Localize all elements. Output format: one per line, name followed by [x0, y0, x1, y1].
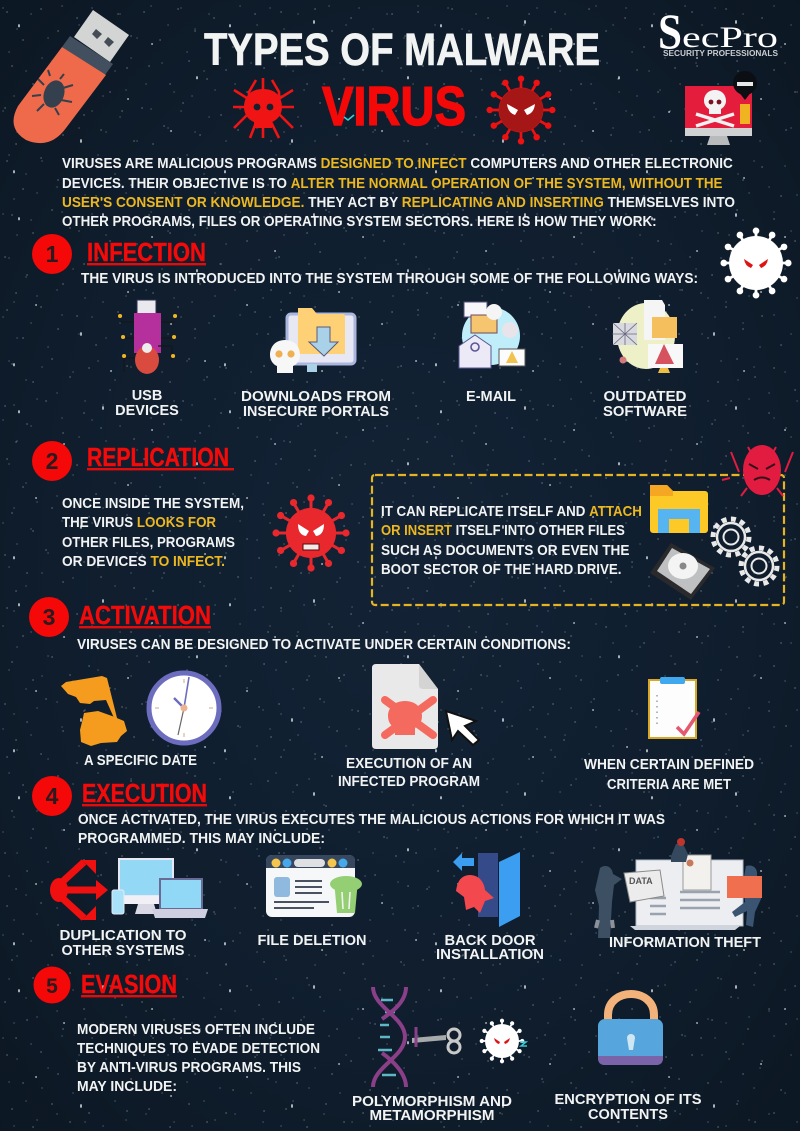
icon: angry red virus	[276, 498, 346, 568]
label: USB devices: DEVICES	[115, 403, 179, 419]
text: evasion	[77, 1022, 320, 1095]
icon: outdated software	[613, 300, 683, 373]
intro text: USER'S CONSENT OR KNOWLEDGE. THEY ACT BY REPLICATING AND INSERTING THEMSELVES INTO	[62, 194, 735, 210]
icon: white virus	[724, 231, 788, 295]
label: encryption: CONTENTS	[588, 1107, 668, 1123]
icon: back door	[453, 852, 520, 927]
label: e-mail: E-MAIL	[466, 389, 516, 405]
section 5: evasion	[34, 966, 702, 1124]
number badge 4	[32, 776, 72, 816]
icon: hacked monitor with skull	[685, 71, 757, 145]
icon: data thieves	[595, 838, 762, 938]
icon: cursor	[446, 711, 479, 745]
label: polymorphism and metamorphism: METAMORPHISM	[370, 1108, 494, 1124]
label: back door installation: INSTALLATION	[436, 947, 544, 963]
logo: SecPro	[658, 3, 779, 59]
icon: red skull circuit bug	[233, 78, 294, 138]
intro text: VIRUSES ARE MALICIOUS PROGRAMS DESIGNED TO INFECT COMPUTERS AND OTHER ELECTRONIC	[62, 155, 733, 171]
icon: red spreading arrows	[50, 860, 108, 920]
logo: SecPro: SECURITY PROFESSIONALS	[663, 49, 779, 58]
text: looks for files: ONCE INSIDE THE SYSTEM,	[62, 496, 244, 512]
icon: red bug	[722, 445, 793, 496]
label: defined criteria: CRITERIA ARE MET	[607, 777, 731, 793]
label: downloads from insecure portals: DOWNLOADS FROM	[241, 389, 391, 405]
icon: USB stick with bug	[14, 10, 129, 143]
label: outdated software	[603, 389, 687, 420]
text: evasion: MODERN VIRUSES OFTEN INCLUDE	[77, 1022, 315, 1038]
icon: data thieves: DATA	[629, 876, 653, 886]
text: looks for files: THE VIRUS LOOKS FOR	[62, 513, 216, 530]
section 3: activation	[29, 597, 754, 793]
text: looks for files	[62, 496, 244, 569]
label: back door installation	[436, 933, 544, 963]
callout: replicate and attach: OR INSERT ITSELF INTO OTHER FILES	[381, 522, 625, 538]
label: outdated software: OUTDATED	[604, 389, 686, 405]
section 1: infection	[32, 231, 788, 420]
subtitle: infection: THE VIRUS IS INTRODUCED INTO THE SYSTEM THROUGH SOME OF THE FOLLOWING WAYS:	[81, 271, 698, 287]
icon: padlock	[598, 994, 663, 1065]
icon: orange calendar shape	[61, 676, 127, 746]
label: duplication: DUPLICATION TO	[60, 928, 186, 944]
intro text: OTHER PROGRAMS, FILES OR OPERATING SYSTEM SECTORS. HERE IS HOW THEY WORK:	[62, 212, 657, 229]
logo: SecPro: ecPro	[682, 21, 778, 54]
label: duplication	[60, 928, 186, 959]
text: execution: ONCE ACTIVATED, THE VIRUS EXECUTES THE MALICIOUS ACTIONS FOR WHICH IT WAS	[78, 812, 665, 828]
section 2: replication	[32, 441, 793, 605]
number badge 5	[34, 966, 70, 1004]
icon: file deletion browser	[266, 855, 362, 917]
icon: devices	[112, 859, 208, 918]
icon: red virus with eyes	[490, 79, 552, 141]
number badge 1	[32, 234, 72, 274]
label: file deletion: FILE DELETION	[258, 933, 366, 949]
icon: small white virus	[482, 1021, 527, 1061]
text: evasion: BY ANTI-VIRUS PROGRAMS. THIS	[77, 1060, 301, 1076]
icon: folder	[650, 485, 708, 533]
icon: gears	[713, 519, 777, 584]
icon: DNA strand	[373, 987, 406, 1087]
heading: infection: INFECTION	[87, 237, 206, 267]
text: execution: PROGRAMMED. THIS MAY INCLUDE:	[78, 831, 325, 847]
section 4: execution	[32, 776, 762, 963]
text: looks for files: OR DEVICES TO INFECT.	[62, 553, 225, 569]
icon: USB bug	[120, 300, 175, 374]
icon: e-mail threats	[459, 302, 525, 368]
label: execution of an infected program	[338, 756, 480, 790]
callout: replicate and attach: IT CAN REPLICATE ITSELF AND ATTACH	[381, 502, 642, 519]
intro text	[62, 155, 735, 229]
label: defined criteria: WHEN CERTAIN DEFINED	[584, 757, 754, 773]
number badge 3: 3	[43, 604, 55, 630]
label: encryption	[554, 1092, 702, 1123]
icon: clock	[149, 673, 219, 743]
logo: SecPro: S	[658, 3, 682, 59]
label: outdated software: SOFTWARE	[603, 404, 687, 420]
heading: execution: EXECUTION	[82, 778, 207, 808]
text: looks for files: OTHER FILES, PROGRAMS	[62, 535, 235, 551]
title: TYPES OF MALWARE	[204, 24, 600, 75]
icon: hard drive	[650, 543, 715, 600]
label: USB devices	[115, 388, 179, 419]
heading: replication: REPLICATION	[87, 442, 229, 472]
label: defined criteria	[584, 757, 754, 793]
number badge 2: 2	[46, 448, 58, 474]
number badge 2	[32, 441, 72, 481]
icon: clipboard	[649, 677, 699, 738]
callout: replicate and attach	[372, 475, 784, 605]
number badge 4: 4	[46, 783, 59, 809]
intro text: DEVICES. THEIR OBJECTIVE IS TO ALTER THE NORMAL OPERATION OF THE SYSTEM, WITHOUT THE	[62, 175, 722, 191]
label: specific date: A SPECIFIC DATE	[84, 753, 197, 769]
label: downloads from insecure portals: INSECURE PORTALS	[243, 404, 389, 420]
label: USB devices: USB	[132, 388, 162, 404]
callout: replicate and attach: BOOT SECTOR OF THE HARD DRIVE.	[381, 560, 621, 577]
text: evasion: TECHNIQUES TO EVADE DETECTION	[77, 1041, 320, 1057]
number badge 1: 1	[46, 241, 59, 267]
label: back door installation: BACK DOOR	[444, 933, 536, 949]
number badge 3	[29, 597, 69, 637]
text: evasion: MAY INCLUDE:	[77, 1079, 177, 1095]
label: downloads from insecure portals	[241, 389, 391, 420]
icon: scissors	[412, 1027, 460, 1053]
icon: download folder and skull	[270, 308, 355, 373]
heading: VIRUS: VIRUS	[322, 75, 466, 137]
label: polymorphism and metamorphism: POLYMORPHISM AND	[352, 1094, 512, 1110]
label: polymorphism and metamorphism	[352, 1094, 512, 1124]
label: execution of an infected program: EXECUTION OF AN	[346, 756, 472, 772]
icon: infected file	[372, 664, 438, 749]
subtitle: activation: VIRUSES CAN BE DESIGNED TO ACTIVATE UNDER CERTAIN CONDITIONS:	[77, 637, 571, 653]
text: execution	[78, 812, 665, 847]
number badge 5: 5	[46, 975, 58, 998]
label: duplication: OTHER SYSTEMS	[62, 943, 185, 959]
heading: evasion: EVASION	[81, 969, 177, 999]
label: encryption: ENCRYPTION OF ITS	[554, 1092, 702, 1108]
label: information theft: INFORMATION THEFT	[609, 935, 761, 951]
heading: activation: ACTIVATION	[79, 600, 211, 630]
callout: replicate and attach: SUCH AS DOCUMENTS OR EVEN THE	[381, 542, 629, 558]
label: execution of an infected program: INFECTED PROGRAM	[338, 774, 480, 790]
